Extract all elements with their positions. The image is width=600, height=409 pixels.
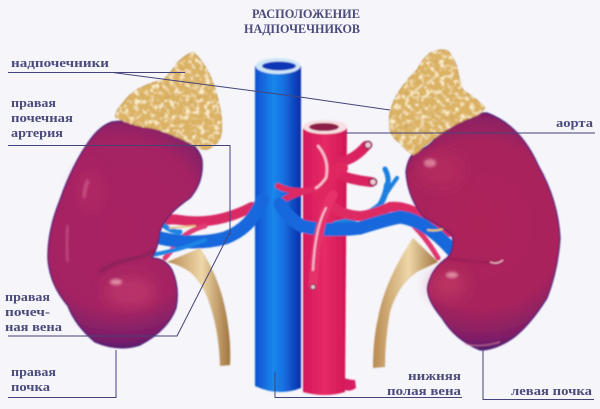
title: РАСПОЛОЖЕНИЕ bbox=[252, 6, 360, 21]
label: inferior vena cava: нижняя bbox=[408, 368, 461, 383]
left kidney bbox=[406, 113, 560, 350]
label: right kidney: правая bbox=[11, 364, 56, 379]
ureter: right kidney bbox=[167, 248, 230, 366]
ureter: left kidney bbox=[373, 238, 438, 368]
label: right renal vein bbox=[5, 289, 63, 334]
aorta bbox=[303, 120, 356, 395]
label: right renal artery: правая bbox=[11, 95, 56, 110]
title bbox=[244, 6, 360, 36]
aorta branches bbox=[276, 142, 376, 206]
renal arteries bbox=[160, 207, 450, 258]
label: right renal vein: правая bbox=[5, 289, 50, 304]
title: НАДПОЧЕЧНИКОВ bbox=[244, 21, 360, 36]
label: adrenal glands: надпочечники bbox=[11, 55, 110, 70]
aorta crossing over vein bbox=[310, 195, 333, 290]
leader lines bbox=[8, 72, 595, 400]
label: right kidney bbox=[11, 364, 56, 394]
label: inferior vena cava: полая вена bbox=[387, 383, 462, 398]
left adrenal gland bbox=[389, 50, 485, 155]
label: right renal vein: ная вена bbox=[5, 319, 63, 334]
renal veins bbox=[152, 200, 452, 255]
label: inferior vena cava bbox=[387, 368, 462, 398]
right adrenal gland bbox=[115, 52, 222, 150]
blue Y vessel: left adrenal vein bbox=[335, 169, 397, 224]
label: right renal artery: артерия bbox=[11, 125, 63, 140]
label: left kidney: левая почка bbox=[511, 383, 593, 398]
label: aorta: аорта bbox=[556, 115, 594, 130]
label: right renal vein: почеч- bbox=[5, 304, 50, 319]
label: right kidney: почка bbox=[11, 379, 51, 394]
inferior vena cava bbox=[255, 58, 301, 392]
label: right renal artery bbox=[11, 95, 73, 140]
label: right renal artery: почечная bbox=[11, 110, 73, 125]
right kidney bbox=[48, 121, 202, 348]
